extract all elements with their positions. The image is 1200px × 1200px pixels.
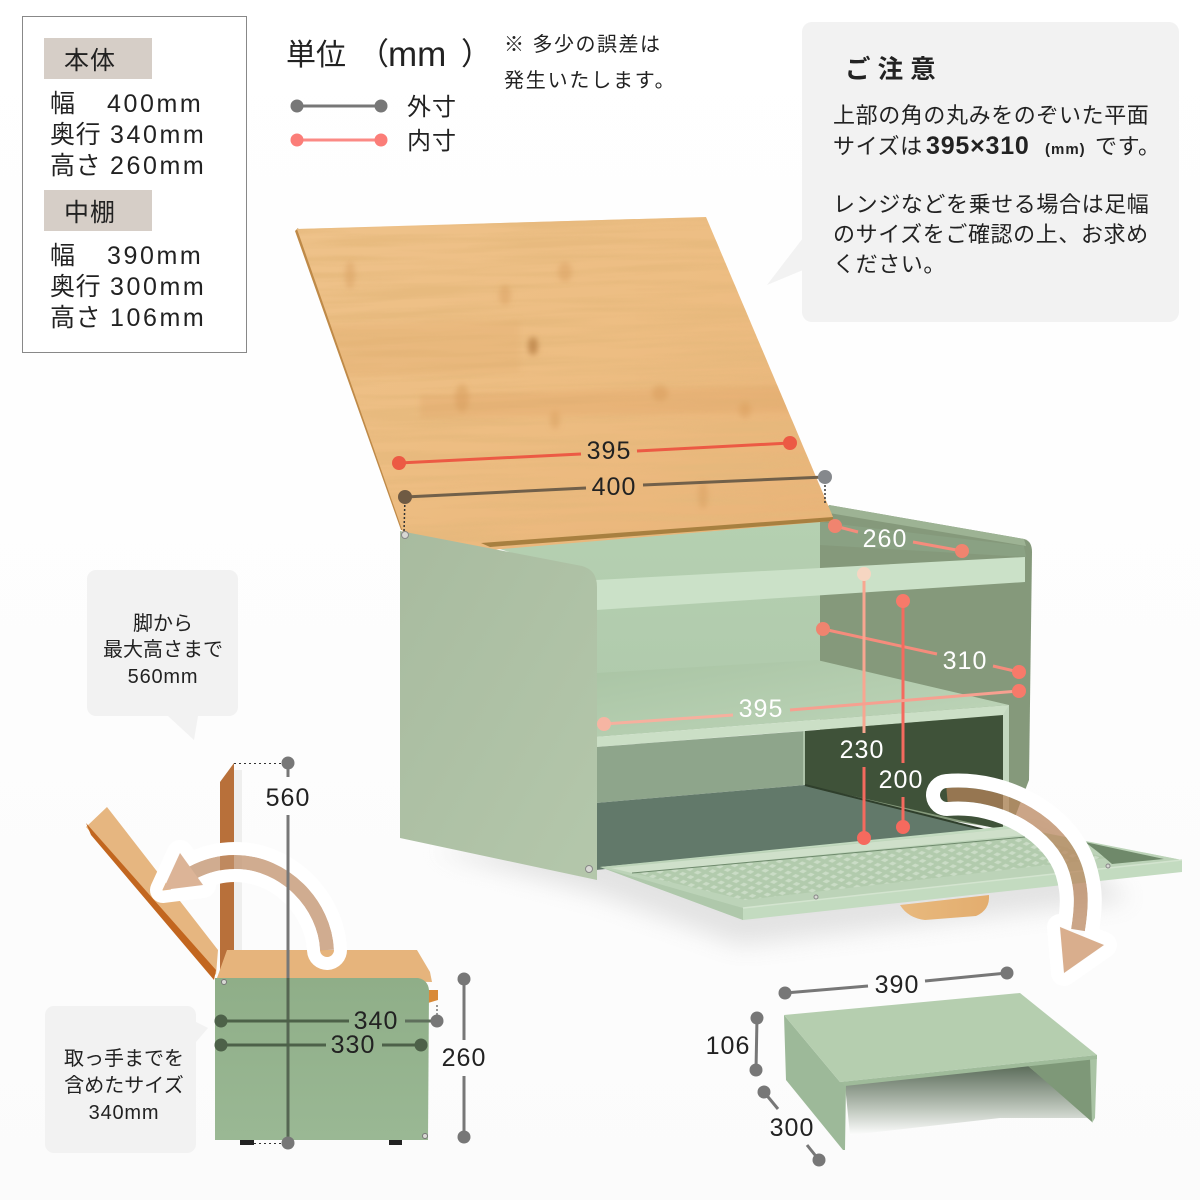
door [600, 826, 1182, 920]
side view product [86, 763, 438, 1145]
callout: max height: 560mm [128, 666, 198, 688]
vertical lid [220, 763, 242, 973]
dimension: depth 340 [214, 1005, 444, 1035]
caution body: です。 [1095, 134, 1161, 159]
dimension: height 230: 230 [840, 736, 884, 764]
unit heading: （ [358, 37, 389, 72]
body screws [222, 980, 428, 1138]
shelf right wall [1027, 1058, 1092, 1122]
dimension: body height 260 [442, 972, 486, 1144]
dimension: shelf height 106: 106 [706, 1032, 750, 1060]
legend: outer size: 外寸 [407, 94, 457, 121]
body dimensions: 400mm [107, 90, 203, 118]
shelf dimensions: 300mm [110, 273, 206, 301]
dimension: height 200: 200 [879, 766, 923, 794]
body dimensions: 高さ [50, 152, 101, 180]
dimension: height 230 [840, 567, 884, 845]
dimension: body height 260: 260 [442, 1044, 486, 1072]
callout: max height: 最大高さまで [103, 638, 223, 661]
dimension: outer lid 400: 400 [592, 473, 636, 501]
arrow: lid opening [150, 842, 347, 970]
inner shelf product [784, 993, 1097, 1150]
caution body: (mm) [1045, 141, 1086, 158]
body dimensions [50, 90, 206, 180]
dimension: width 395 [597, 684, 1026, 731]
dimension: outer lid 400 [398, 470, 832, 532]
right wall [820, 505, 1032, 830]
heading: shelf: 中棚 [64, 199, 116, 227]
top wood [217, 950, 432, 982]
dimension: inner lid 395: 395 [587, 437, 631, 465]
dimension: depth 310 [816, 622, 1026, 679]
caution body: 395×310 [926, 132, 1030, 160]
wooden foot [900, 895, 989, 920]
shelf left wall [784, 1015, 846, 1150]
dimension: shelf height 106 [706, 1012, 764, 1076]
heading: body [44, 38, 152, 79]
main product: bread box [275, 192, 1182, 945]
dimension: shelf depth 300: 300 [770, 1114, 814, 1142]
top rail [596, 557, 1025, 610]
shelf dimensions [50, 242, 206, 332]
legend: inner size [290, 128, 457, 155]
dimension: inner lid 395 [392, 436, 797, 470]
handle [428, 990, 438, 1003]
body dimensions: 幅 [50, 90, 76, 118]
tolerance note [504, 33, 676, 92]
shelf dimensions: 幅 [50, 242, 76, 270]
shelf front edge [840, 1055, 1097, 1086]
dimension: shelf width 390: 390 [875, 971, 919, 999]
body dimensions: 340mm [110, 121, 206, 149]
shelf dimensions: 106mm [110, 304, 206, 332]
body dimensions: 奥行 [50, 121, 101, 149]
caution body: レンジなどを乗せる場合は足幅 [833, 192, 1149, 217]
unit heading [286, 35, 492, 74]
unit heading: mm [388, 35, 446, 74]
dimension: width 395: 395 [739, 695, 783, 723]
callout: with handle: 取っ手までを [64, 1047, 184, 1070]
dimension: depth 260: 260 [863, 525, 907, 553]
callout: caution [767, 22, 1179, 322]
dimension: max height 560: 560 [266, 784, 310, 812]
callout: with handle: 340mm [89, 1102, 159, 1124]
caution body: サイズは [833, 134, 923, 159]
tolerance note: 発生いたします。 [504, 69, 676, 92]
heading: shelf [44, 190, 152, 231]
caution heading: ご 注 意 [845, 55, 936, 84]
green body [215, 978, 429, 1140]
legend: inner size: 内寸 [407, 128, 457, 155]
callout: with handle [45, 1006, 208, 1153]
floor shadow [430, 830, 1130, 945]
hinge screws [402, 532, 1110, 899]
callout: with handle: 含めたサイズ [64, 1074, 184, 1097]
unit heading: ） [461, 37, 492, 72]
body dimensions: 260mm [110, 152, 206, 180]
legend: outer size [290, 94, 457, 121]
slanted lid [86, 807, 218, 980]
bamboo lid [295, 217, 833, 550]
lower cavity [596, 705, 1009, 870]
caution body [833, 103, 1161, 277]
arrow: door opening [926, 774, 1104, 973]
tolerance note: ※ 多少の誤差は [504, 33, 662, 56]
caution body: のサイズをご確認の上、お求め [833, 222, 1149, 247]
left side panel [400, 531, 597, 880]
shelf top [784, 993, 1097, 1082]
middle shelf [596, 660, 1009, 747]
dimension: max height 560 [234, 756, 310, 1150]
heading: body: 本体 [64, 47, 116, 75]
dimension: shelf width 390 [778, 966, 1014, 1000]
shelf dimensions: 390mm [107, 242, 203, 270]
unit heading: 単位 [286, 39, 346, 72]
dimension: shelf depth 300 [758, 1086, 826, 1166]
callout: max height [87, 570, 238, 740]
shelf dimensions: 高さ [50, 304, 101, 332]
dimension: depth 330: 330 [331, 1031, 375, 1059]
caution body: 上部の角の丸みをのぞいた平面 [833, 103, 1149, 128]
shelf dimensions: 奥行 [50, 273, 101, 301]
spec panel [22, 16, 246, 352]
caution body: ください。 [833, 252, 946, 277]
callout: max height: 脚から [133, 612, 193, 635]
back wall [481, 520, 820, 690]
dimension: depth 330 [214, 1031, 428, 1059]
shelf shadow opening [845, 1065, 1090, 1135]
dimension: depth 310: 310 [943, 647, 987, 675]
feet [240, 1139, 402, 1145]
unit legend [286, 35, 492, 155]
dimension: depth 260 [828, 519, 969, 558]
dimension: depth 340: 340 [354, 1007, 398, 1035]
dimension: height 200 [879, 594, 923, 834]
